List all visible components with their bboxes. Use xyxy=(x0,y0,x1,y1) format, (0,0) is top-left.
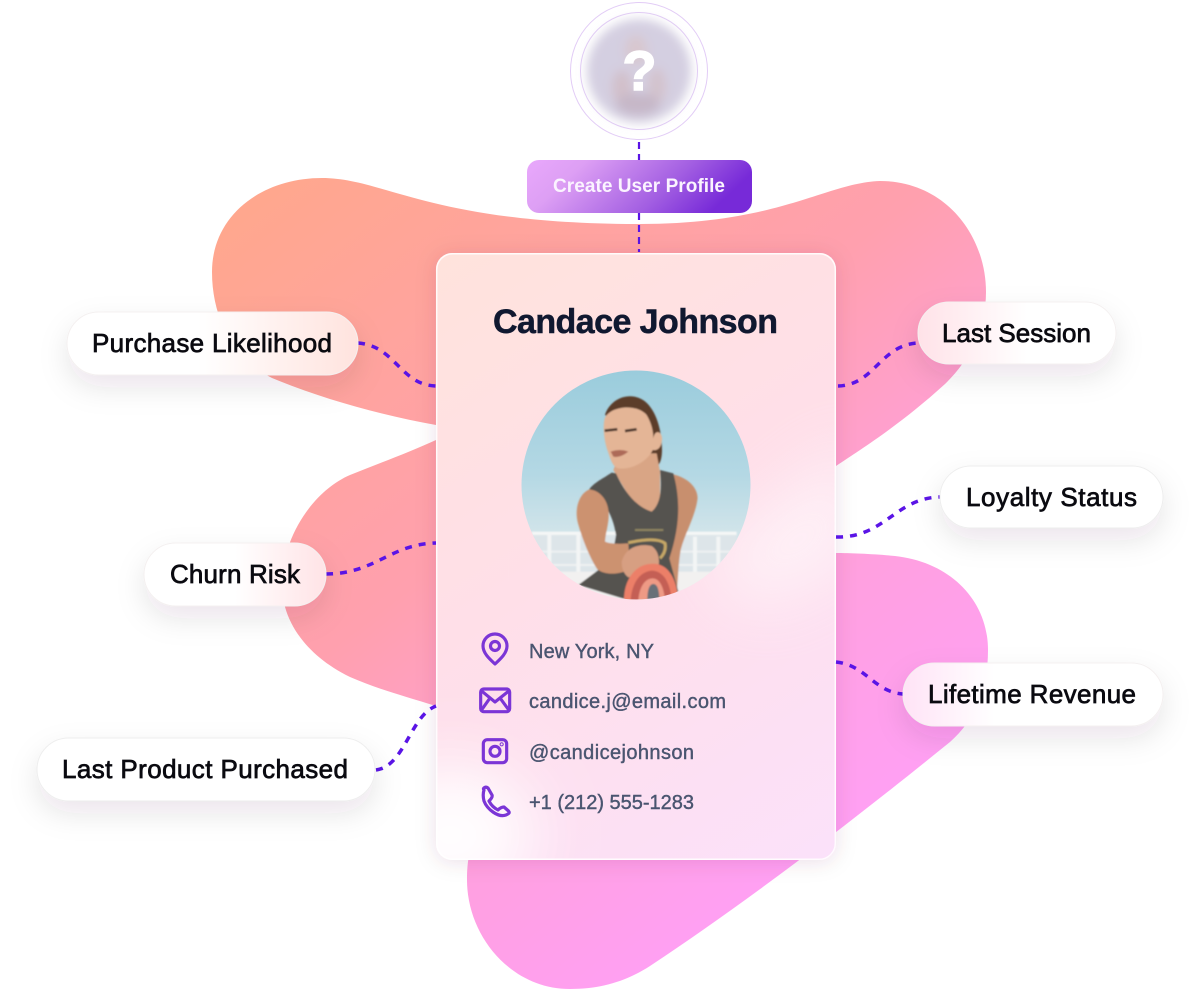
contact: email: candice.j@email.com xyxy=(529,691,726,713)
label: last session xyxy=(918,302,1116,364)
label: churn risk: Churn Risk xyxy=(170,559,301,589)
card sheen xyxy=(365,440,860,905)
icon: envelope xyxy=(481,689,510,712)
connector: last session xyxy=(838,343,918,386)
label: last product purchased xyxy=(37,738,375,801)
railing xyxy=(534,536,736,572)
icon: instagram xyxy=(483,740,507,763)
tank top xyxy=(578,470,678,599)
gold logo xyxy=(628,540,665,558)
profile photo xyxy=(520,370,752,602)
connector: button to card xyxy=(638,213,640,252)
blurred portrait xyxy=(587,19,691,123)
label: last product purchased: Last Product Purchased xyxy=(62,754,348,784)
connector: purchase likelihood xyxy=(358,343,436,386)
label: purchase likelihood: Purchase Likelihood xyxy=(92,328,332,358)
face xyxy=(604,408,662,469)
question mark: ? xyxy=(622,39,657,102)
icon: telephone xyxy=(483,787,509,816)
contact: phone xyxy=(483,787,694,816)
connector: loyalty status xyxy=(836,497,940,537)
label: loyalty status: Loyalty Status xyxy=(966,482,1137,512)
right arm xyxy=(663,473,698,593)
label: churn risk xyxy=(144,543,326,606)
button: create user profile xyxy=(527,160,752,213)
neck and chest xyxy=(613,453,660,514)
icon: map pin xyxy=(483,634,507,664)
label: purchase likelihood xyxy=(67,312,358,375)
contact: phone: +1 (212) 555-1283 xyxy=(529,792,694,814)
resistance band xyxy=(624,564,678,600)
hair back xyxy=(605,396,662,467)
label: last session: Last Session xyxy=(942,318,1091,348)
profile card xyxy=(430,252,842,868)
connector: churn risk xyxy=(326,543,436,574)
unknown user avatar xyxy=(570,2,708,140)
contact: instagram: @candicejohnson xyxy=(529,742,694,764)
connector: avatar to button xyxy=(638,142,640,160)
background blob xyxy=(212,178,988,989)
contact: location xyxy=(483,634,654,664)
contact: location: New York, NY xyxy=(529,641,654,663)
button: create user profile: Create User Profile xyxy=(553,176,725,197)
label: lifetime revenue: Lifetime Revenue xyxy=(928,679,1136,709)
label: loyalty status xyxy=(940,466,1163,528)
hand xyxy=(622,545,659,577)
connector: last product purchased xyxy=(376,706,436,770)
label: lifetime revenue xyxy=(903,663,1163,726)
connector: lifetime revenue xyxy=(836,662,903,694)
left arm xyxy=(577,489,630,574)
outer rings xyxy=(570,2,708,140)
name heading: Candace Johnson xyxy=(493,303,778,341)
